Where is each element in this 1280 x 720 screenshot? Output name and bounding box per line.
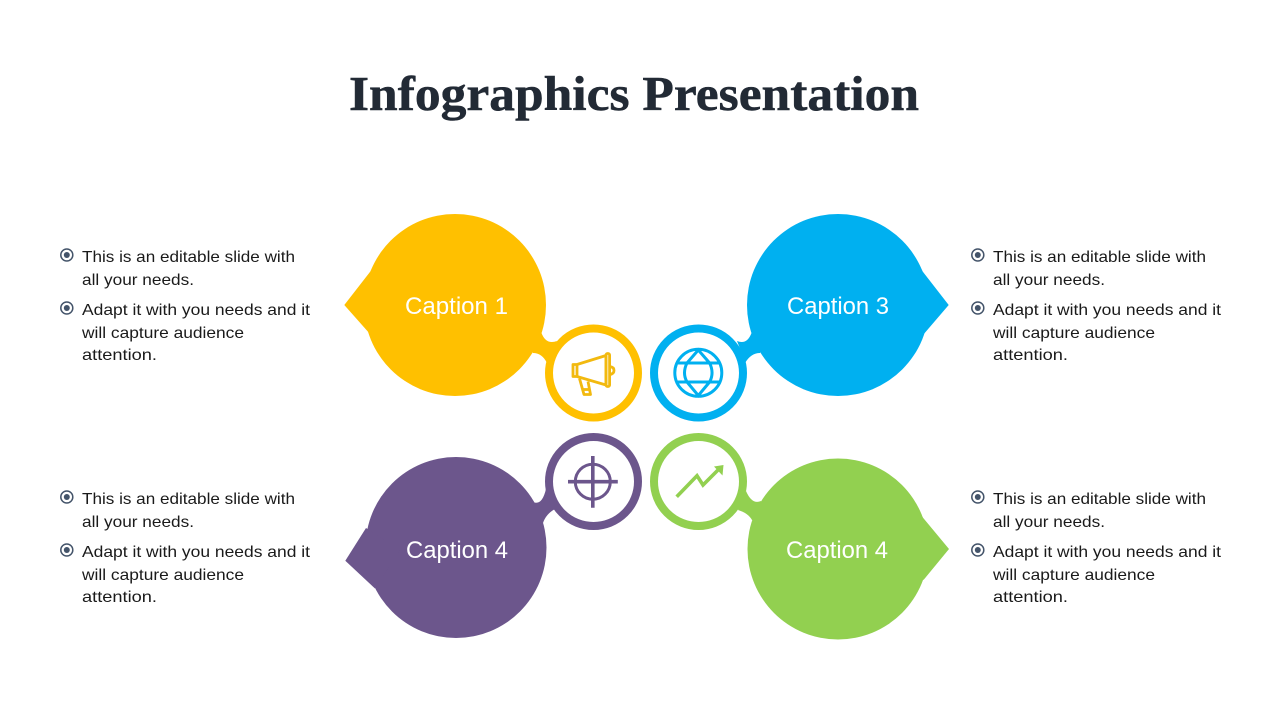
bullet text 1: [993, 249, 1206, 289]
caption label: Caption 4: [406, 537, 508, 564]
caption label: Caption 4: [786, 537, 888, 564]
title: Infographics Presentation: [349, 66, 919, 121]
bullet text 2: [992, 544, 1222, 606]
panel: caption 3 blue: [654, 214, 949, 418]
bullet text 1: all your needs.: [993, 514, 1105, 531]
bullet: [972, 249, 984, 261]
bullet text 1: This is an editable slide with: [82, 491, 295, 508]
bullet text 2: attention.: [82, 347, 157, 364]
text block: top left: [61, 249, 311, 364]
icon: globe: [675, 349, 722, 396]
panel: caption 4 green: [654, 437, 949, 640]
icon: megaphone: [573, 354, 614, 394]
caption label: Caption 1: [405, 293, 508, 320]
icon ring: yellow: [549, 328, 638, 418]
bullet text 1: all your needs.: [993, 272, 1105, 289]
bullet text 1: [82, 491, 295, 531]
bullet text 2: [81, 544, 311, 606]
shape: yellow speech circle: [344, 214, 557, 396]
bullet text 1: This is an editable slide with: [82, 249, 295, 266]
bullet text 2: will capture audience: [81, 567, 244, 584]
shape: blue speech circle: [737, 214, 949, 396]
text block: bottom right: [972, 491, 1222, 606]
bullet text 2: [81, 302, 311, 364]
caption label: Caption 3: [787, 293, 889, 320]
bullet: [61, 491, 73, 503]
bullet text 1: This is an editable slide with: [993, 491, 1206, 508]
bullet: [61, 544, 73, 556]
icon: crosshair target: [568, 456, 618, 508]
bullet: [972, 544, 984, 556]
icon: rising trend arrow: [677, 465, 724, 497]
bullet text 2: attention.: [993, 347, 1068, 364]
bullet text 2: Adapt it with you needs and it: [82, 302, 311, 319]
bullet text 1: all your needs.: [82, 272, 194, 289]
text block: bottom left: [61, 491, 311, 606]
bullet text 1: [82, 249, 295, 289]
bullet text 2: attention.: [993, 589, 1068, 606]
bullet text 2: will capture audience: [992, 325, 1155, 342]
text block: top right: [972, 249, 1222, 364]
bullet text 2: [992, 302, 1222, 364]
bullet: [61, 249, 73, 261]
shape: purple speech circle: [345, 457, 555, 638]
bullet text 2: attention.: [82, 589, 157, 606]
bullet: [972, 302, 984, 314]
icon ring: purple: [549, 437, 638, 526]
icon ring: green: [654, 437, 743, 526]
bullet: [972, 491, 984, 503]
bullet text 2: Adapt it with you needs and it: [993, 302, 1222, 319]
bullet text 2: Adapt it with you needs and it: [993, 544, 1222, 561]
bullet text 1: This is an editable slide with: [993, 249, 1206, 266]
bullet text 2: will capture audience: [81, 325, 244, 342]
bullet: [61, 302, 73, 314]
bullet text 1: [993, 491, 1206, 531]
bullet text 2: Adapt it with you needs and it: [82, 544, 311, 561]
panel: caption 1 yellow: [344, 214, 638, 418]
bullet text 1: all your needs.: [82, 514, 194, 531]
panel: caption 4 purple: [345, 437, 638, 638]
bullet text 2: will capture audience: [992, 567, 1155, 584]
icon ring: blue: [654, 328, 743, 418]
shape: green speech circle: [738, 458, 949, 640]
